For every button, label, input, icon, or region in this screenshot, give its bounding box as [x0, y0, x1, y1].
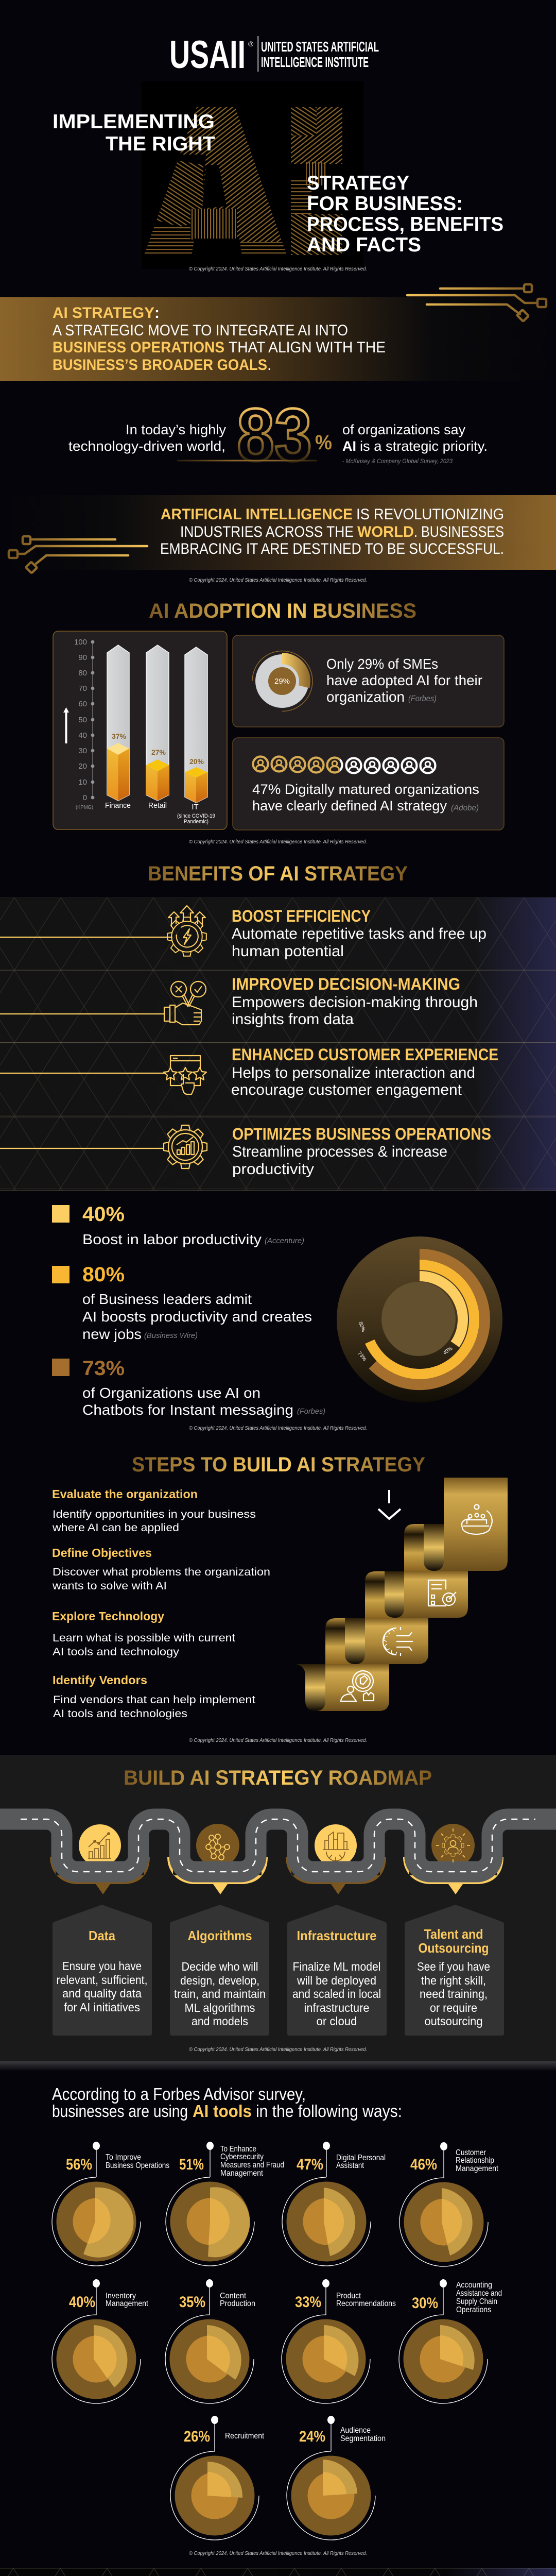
title — [53, 111, 503, 256]
benefit: improved decision-making — [0, 975, 478, 1028]
benefit: boost efficiency: BOOST EFFICIENCY — [232, 907, 371, 925]
chart: 56 percent business operations — [52, 2142, 169, 2266]
chart: 30 percent accounting — [399, 2279, 502, 2403]
card: infrastructure: and scaled in local — [292, 1987, 381, 2001]
step: technology — [52, 1609, 235, 1658]
benefit: boost efficiency: Automate repetitive tasks and free up — [232, 925, 486, 942]
statistic: 83 percent — [68, 393, 488, 477]
benefit: optimizes business operations: Streamline processes & increase — [232, 1143, 447, 1160]
card: algorithms: Decide who will — [181, 1960, 258, 1973]
chart: 40 percent inventory: Management — [106, 2299, 149, 2308]
benefit: improved decision-making: insights from data — [232, 1011, 354, 1028]
chart: 47 percent digital assistant: Assistant — [336, 2161, 364, 2170]
chart axis: 10 — [78, 778, 87, 787]
banner: AI strategy definition: . — [267, 357, 271, 374]
donut chart: 29 percent: 29% — [274, 677, 290, 686]
panel: benefits band — [0, 897, 556, 1191]
statistic: 83 percent: In today’s highly — [126, 422, 226, 437]
card: infrastructure: will be deployed — [297, 1974, 376, 1987]
card: data: Ensure you have — [62, 1959, 142, 1973]
chart: 35 percent content: Production — [220, 2299, 255, 2308]
chart: 56 percent business operations: 56% — [66, 2156, 92, 2173]
icon: gear with arrows — [0, 906, 206, 956]
survey intro text: According to a Forbes Advisor survey, — [52, 2084, 306, 2104]
banner: artificial intelligence statement: IS REVOLUTIONIZING — [356, 506, 504, 523]
chart: 51 percent cybersecurity: Cybersecurity — [220, 2153, 264, 2161]
title: PROCESS, BENEFITS — [307, 213, 503, 235]
card: infrastructure: Finalize ML model — [292, 1960, 381, 1973]
step: evaluate — [52, 1487, 256, 1534]
title: STRATEGY — [307, 172, 409, 194]
chart: 40 percent inventory: Inventory — [106, 2292, 136, 2300]
copyright: © Copyright 2024. United States Artificial Intelligence Institute. All Rights Reserved. — [189, 1426, 367, 1431]
bar: IT 20%: 20% — [189, 757, 204, 766]
header: logo: USAII — [169, 33, 246, 77]
card: infrastructure: Infrastructure — [297, 1928, 377, 1943]
bar: finance 37% — [105, 645, 131, 810]
benefit: optimizes business operations — [0, 1125, 491, 1178]
banner: AI strategy definition: AI STRATEGY — [53, 304, 154, 321]
banner: artificial intelligence statement: EMBRACING IT ARE DESTINED TO BE SUCCESSFUL. — [160, 540, 504, 557]
survey intro text: in the following ways: — [256, 2102, 402, 2121]
header: logo: INTELLIGENCE INSTITUTE — [261, 54, 369, 70]
diagram: ribbon stairs — [296, 1478, 508, 1711]
SMEs text: (Forbes) — [408, 694, 437, 703]
step: technology: AI tools and technology — [53, 1646, 180, 1658]
icon: vendor search — [341, 1671, 374, 1701]
step: objectives: Define Objectives — [52, 1546, 152, 1560]
card: talent and outsourcing: See if you have — [417, 1960, 490, 1973]
stat: 73 percent: of Organizations use AI on — [82, 1385, 260, 1401]
chart: radial bars — [337, 1236, 502, 1402]
chart: 47 percent digital assistant — [282, 2142, 386, 2266]
panel: productivity statistics — [52, 1203, 502, 1418]
icon: hand with options — [0, 981, 206, 1025]
banner: artificial intelligence statement — [0, 495, 556, 570]
step: technology: Explore Technology — [52, 1609, 164, 1623]
chart: 51 percent cybersecurity: Measures and Fraud — [220, 2161, 284, 2170]
chart axis: 90 — [78, 653, 87, 662]
matured text — [252, 782, 479, 814]
chart axis: 0 — [83, 793, 87, 802]
card: data — [53, 1905, 152, 2036]
panel: SMEs adoption — [233, 635, 504, 727]
matured text: 47% Digitally matured organizations — [252, 782, 479, 797]
benefit: enhanced customer experience: encourage customer engagement — [231, 1081, 462, 1098]
icon: stars rating — [0, 1056, 206, 1094]
card: talent and outsourcing: Talent and — [424, 1926, 483, 1942]
card: infrastructure: infrastructure — [304, 2001, 370, 2014]
card: talent and outsourcing — [405, 1905, 504, 2036]
chart: 35 percent content — [165, 2279, 255, 2403]
bar: IT 20%: Pandemic) — [184, 819, 208, 825]
road graphic — [0, 1819, 556, 1894]
chart: 26 percent recruitment: Recruitment — [225, 2432, 265, 2441]
heading: benefits of AI strategy: BENEFITS OF AI STRATEGY — [148, 862, 408, 885]
step: vendors: AI tools and technologies — [53, 1708, 187, 1720]
chart axis: 60 — [78, 700, 87, 708]
title: IMPLEMENTING — [53, 111, 215, 133]
chart: 46 percent customer relationship: Management — [456, 2164, 499, 2173]
icons: people row — [253, 756, 436, 773]
title: THE RIGHT — [106, 133, 215, 155]
step: evaluate: Evaluate the organization — [52, 1487, 198, 1501]
SMEs text: have adopted AI for their — [326, 672, 482, 688]
icon: talent gear — [436, 1828, 470, 1862]
matured text: (Adobe) — [451, 804, 479, 812]
chart: 51 percent cybersecurity: To Enhance — [220, 2145, 256, 2154]
card: talent and outsourcing: need training, — [420, 1987, 488, 2001]
survey intro text: businesses are using — [52, 2102, 188, 2121]
statistic: 83 percent: technology-driven world, — [68, 438, 225, 454]
chart axis: (KPMG) — [76, 804, 93, 810]
header: logo: ® — [248, 40, 254, 48]
chart axis: 30 — [78, 747, 87, 755]
chart axis: 100 — [74, 638, 87, 647]
chart: 24 percent audience segmentation — [287, 2416, 386, 2540]
chart axis: 40 — [78, 731, 87, 740]
stat: 80 percent: new jobs — [82, 1326, 142, 1342]
bar: retail 27%: 27% — [151, 748, 166, 756]
big number 83: 83 — [237, 393, 312, 477]
chart: 40 percent inventory — [52, 2279, 149, 2403]
SMEs text: organization — [326, 689, 405, 705]
banner: artificial intelligence statement: WORLD — [357, 523, 414, 540]
bar: finance 37%: 37% — [112, 732, 127, 740]
banner: AI strategy definition: A STRATEGIC MOVE TO INTEGRATE AI INTO — [53, 322, 348, 339]
banner: AI strategy definition: : — [154, 304, 160, 321]
panel: digitally matured organizations — [233, 738, 504, 830]
bar: retail 27%: Retail — [148, 801, 167, 810]
survey intro text — [52, 2084, 402, 2121]
chart: 40 percent inventory: 40% — [69, 2294, 95, 2311]
chart: 33 percent product recommendations: 33% — [295, 2294, 321, 2311]
step: vendors: Identify Vendors — [53, 1673, 147, 1687]
matured text: have clearly defined AI strategy — [252, 798, 447, 814]
chart: 24 percent audience segmentation: Audience — [340, 2426, 371, 2435]
chart: 33 percent product recommendations: Recommendations — [336, 2299, 396, 2308]
arrow: down — [378, 1490, 401, 1519]
SMEs text: Only 29% of SMEs — [326, 656, 438, 672]
chart: 35 percent content: 35% — [179, 2294, 205, 2311]
stat: 80 percent: (Business Wire) — [144, 1331, 198, 1340]
chart: radial bars: 73% — [356, 1351, 368, 1362]
stat: 40 percent: Boost in labor productivity — [82, 1231, 262, 1247]
stat: 80 percent — [52, 1263, 312, 1342]
statistic: 83 percent: is a strategic priority. — [360, 438, 488, 454]
icon: gear with chart — [0, 1125, 207, 1168]
panel: steps text — [52, 1487, 270, 1720]
icon: algorithm network — [206, 1834, 230, 1860]
stat: 40 percent — [52, 1203, 304, 1247]
chart: 46 percent customer relationship — [399, 2142, 499, 2266]
arrow: up — [63, 707, 69, 743]
bar: IT 20%: (since COVID-19 — [177, 813, 215, 819]
card: talent and outsourcing: outsourcing — [424, 2014, 483, 2028]
survey intro text: AI tools — [193, 2102, 252, 2121]
bar: IT 20% — [177, 647, 215, 825]
bar: finance 37%: Finance — [105, 801, 131, 810]
card: data: for AI initiatives — [64, 2001, 140, 2014]
card: infrastructure — [287, 1905, 387, 2036]
step: evaluate: where AI can be applied — [52, 1522, 179, 1534]
chart: 51 percent cybersecurity: 51% — [179, 2156, 204, 2173]
heading: build AI strategy roadmap: BUILD AI STRATEGY ROADMAP — [124, 1767, 432, 1789]
icon: data chart — [88, 1833, 111, 1858]
panel: additional considerations — [0, 2568, 556, 2576]
chart: 30 percent accounting: Operations — [456, 2306, 491, 2314]
step: objectives: Discover what problems the organization — [53, 1566, 270, 1578]
chart: 30 percent accounting: Accounting — [456, 2281, 492, 2290]
benefit: optimizes business operations: productivity — [232, 1161, 314, 1178]
card: talent and outsourcing: or require — [430, 2001, 477, 2014]
SMEs text — [326, 656, 482, 705]
stat: 73 percent: (Forbes) — [297, 1407, 325, 1416]
card: talent and outsourcing: Outsourcing — [418, 1940, 489, 1956]
banner: artificial intelligence statement: . BUSINESSES — [414, 523, 504, 540]
statistic: 83 percent: - McKinsey & Company Global Survey, 2023 — [342, 457, 453, 465]
benefit: enhanced customer experience: Helps to personalize interaction and — [232, 1064, 475, 1081]
bar: IT 20%: IT — [192, 803, 199, 811]
chart: 24 percent audience segmentation: Segmentation — [340, 2434, 386, 2443]
copyright: © Copyright 2024. United States Artificial Intelligence Institute. All Rights Reserved. — [189, 2047, 367, 2053]
step: technology: Learn what is possible with current — [53, 1632, 235, 1644]
statistic: 83 percent: % — [315, 431, 332, 454]
card: data: Data — [89, 1928, 115, 1943]
chart: 47 percent digital assistant: 47% — [297, 2156, 323, 2173]
circuit decoration: left — [9, 536, 147, 573]
chart: 30 percent accounting: Assistance and — [456, 2289, 502, 2298]
step: evaluate: Identify opportunities in your business — [53, 1509, 256, 1520]
copyright: © Copyright 2024. United States Artificial Intelligence Institute. All Rights Reserved. — [189, 578, 367, 583]
chart: radial bars: 40% — [442, 1346, 454, 1356]
copyright: © Copyright 2024. United States Artificial Intelligence Institute. All Rights Reserved. — [189, 2551, 367, 2556]
banner: AI strategy definition: BUSINESS’S BROADER GOALS — [53, 357, 267, 374]
copyright: © Copyright 2024. United States Artificial Intelligence Institute. All Rights Reserved. — [189, 1738, 367, 1743]
chart: 46 percent customer relationship: Relationship — [456, 2156, 494, 2165]
chart: radial bars: 80% — [357, 1321, 366, 1333]
icon: document and target — [428, 1580, 456, 1606]
stat: 73 percent — [52, 1357, 325, 1418]
chart: 51 percent cybersecurity: Management — [220, 2169, 264, 2178]
step: vendors: Find vendors that can help implement — [53, 1694, 255, 1706]
heading: steps to build AI strategy: STEPS TO BUILD AI STRATEGY — [132, 1453, 425, 1476]
header: logo: UNITED STATES ARTIFICIAL — [261, 39, 379, 55]
chart: 56 percent business operations: To Improve — [106, 2153, 141, 2162]
chart: 46 percent customer relationship: Customer — [456, 2148, 486, 2157]
card: data: and quality data — [62, 1987, 142, 2000]
card: algorithms — [170, 1905, 269, 2036]
benefit: enhanced customer experience: ENHANCED CUSTOMER EXPERIENCE — [232, 1045, 498, 1064]
chart axis: 20 — [78, 762, 87, 771]
banner: artificial intelligence statement: ARTIFICIAL INTELLIGENCE — [161, 506, 353, 523]
copyright: © Copyright 2024. United States Artificial Intelligence Institute. All Rights Reserved. — [189, 839, 367, 845]
chart: 33 percent product recommendations — [282, 2279, 396, 2403]
step: vendors — [53, 1673, 255, 1720]
benefit: boost efficiency: human potential — [232, 943, 344, 960]
chart: 35 percent content: Content — [220, 2292, 247, 2300]
stat: 80 percent: AI boosts productivity and creates — [82, 1309, 312, 1325]
banner: AI strategy definition: BUSINESS OPERATIONS — [53, 339, 224, 356]
card: algorithms: ML algorithms — [184, 2001, 255, 2014]
card: algorithms: and models — [192, 2014, 248, 2028]
icon: globe and team — [462, 1504, 492, 1534]
card: talent and outsourcing: the right skill, — [421, 1974, 486, 1987]
banner: AI strategy definition: THAT ALIGN WITH THE — [229, 339, 386, 356]
stat: 40 percent: 40% — [82, 1203, 125, 1226]
statistic: 83 percent: AI — [342, 438, 356, 454]
benefit: improved decision-making: Empowers decision-making through — [232, 994, 478, 1011]
chart: 26 percent recruitment: 26% — [184, 2428, 210, 2445]
chart: 26 percent recruitment — [170, 2416, 265, 2540]
stat: 80 percent: 80% — [82, 1263, 125, 1286]
stat: 73 percent: Chatbots for Instant messaging — [82, 1402, 293, 1418]
chart: 30 percent accounting: Supply Chain — [456, 2297, 497, 2306]
header: logo — [169, 33, 379, 77]
chart axis — [74, 638, 94, 810]
copyright: © Copyright 2024. United States Artificial Intelligence Institute. All Rights Reserved. — [189, 266, 367, 272]
hero graphic: circuit AI letters — [142, 106, 342, 258]
chart: 47 percent digital assistant: Digital Personal — [336, 2154, 386, 2162]
card: infrastructure: or cloud — [316, 2014, 357, 2028]
step: objectives — [52, 1546, 270, 1592]
card: algorithms: design, develop, — [180, 1974, 259, 1987]
chart: 56 percent business operations: Business Operations — [106, 2161, 169, 2170]
benefit: boost efficiency — [0, 906, 486, 960]
statistic: 83 percent: of organizations say — [342, 422, 465, 437]
chart: 30 percent accounting: 30% — [412, 2295, 438, 2312]
donut chart: 29 percent — [252, 651, 312, 711]
bar: retail 27% — [146, 645, 169, 810]
benefit: improved decision-making: IMPROVED DECISION-MAKING — [232, 975, 460, 993]
heading: AI adoption in business: AI ADOPTION IN BUSINESS — [149, 600, 416, 622]
benefit: optimizes business operations: OPTIMIZES BUSINESS OPERATIONS — [232, 1125, 491, 1143]
chart axis: 70 — [78, 684, 87, 693]
panel: roadmap — [0, 1755, 556, 2071]
stat: 73 percent: 73% — [82, 1357, 125, 1380]
chart: 33 percent product recommendations: Product — [336, 2292, 361, 2300]
chart axis: 80 — [78, 669, 87, 677]
icon: infrastructure — [323, 1832, 349, 1861]
chart: 51 percent cybersecurity — [166, 2142, 284, 2266]
step: objectives: wants to solve with AI — [52, 1580, 167, 1592]
panel: adoption bar chart — [53, 631, 227, 829]
card: data: relevant, sufficient, — [57, 1973, 147, 1987]
circuit decoration: top right — [407, 284, 546, 321]
benefit: enhanced customer experience — [0, 1045, 498, 1098]
card: algorithms: Algorithms — [187, 1928, 252, 1943]
stat: 80 percent: of Business leaders admit — [82, 1291, 252, 1307]
card: algorithms: train, and maintain — [174, 1987, 266, 2001]
banner: artificial intelligence statement: INDUSTRIES ACROSS THE — [180, 523, 354, 540]
chart: 24 percent audience segmentation: 24% — [299, 2428, 325, 2445]
stat: 40 percent: (Accenture) — [265, 1236, 304, 1245]
icon: gear with circuit — [383, 1627, 413, 1656]
title: FOR BUSINESS: — [307, 193, 463, 215]
title: AND FACTS — [307, 234, 421, 256]
chart axis: 50 — [78, 716, 87, 724]
banner: AI strategy definition — [0, 297, 556, 381]
chart: 46 percent customer relationship: 46% — [410, 2156, 437, 2173]
